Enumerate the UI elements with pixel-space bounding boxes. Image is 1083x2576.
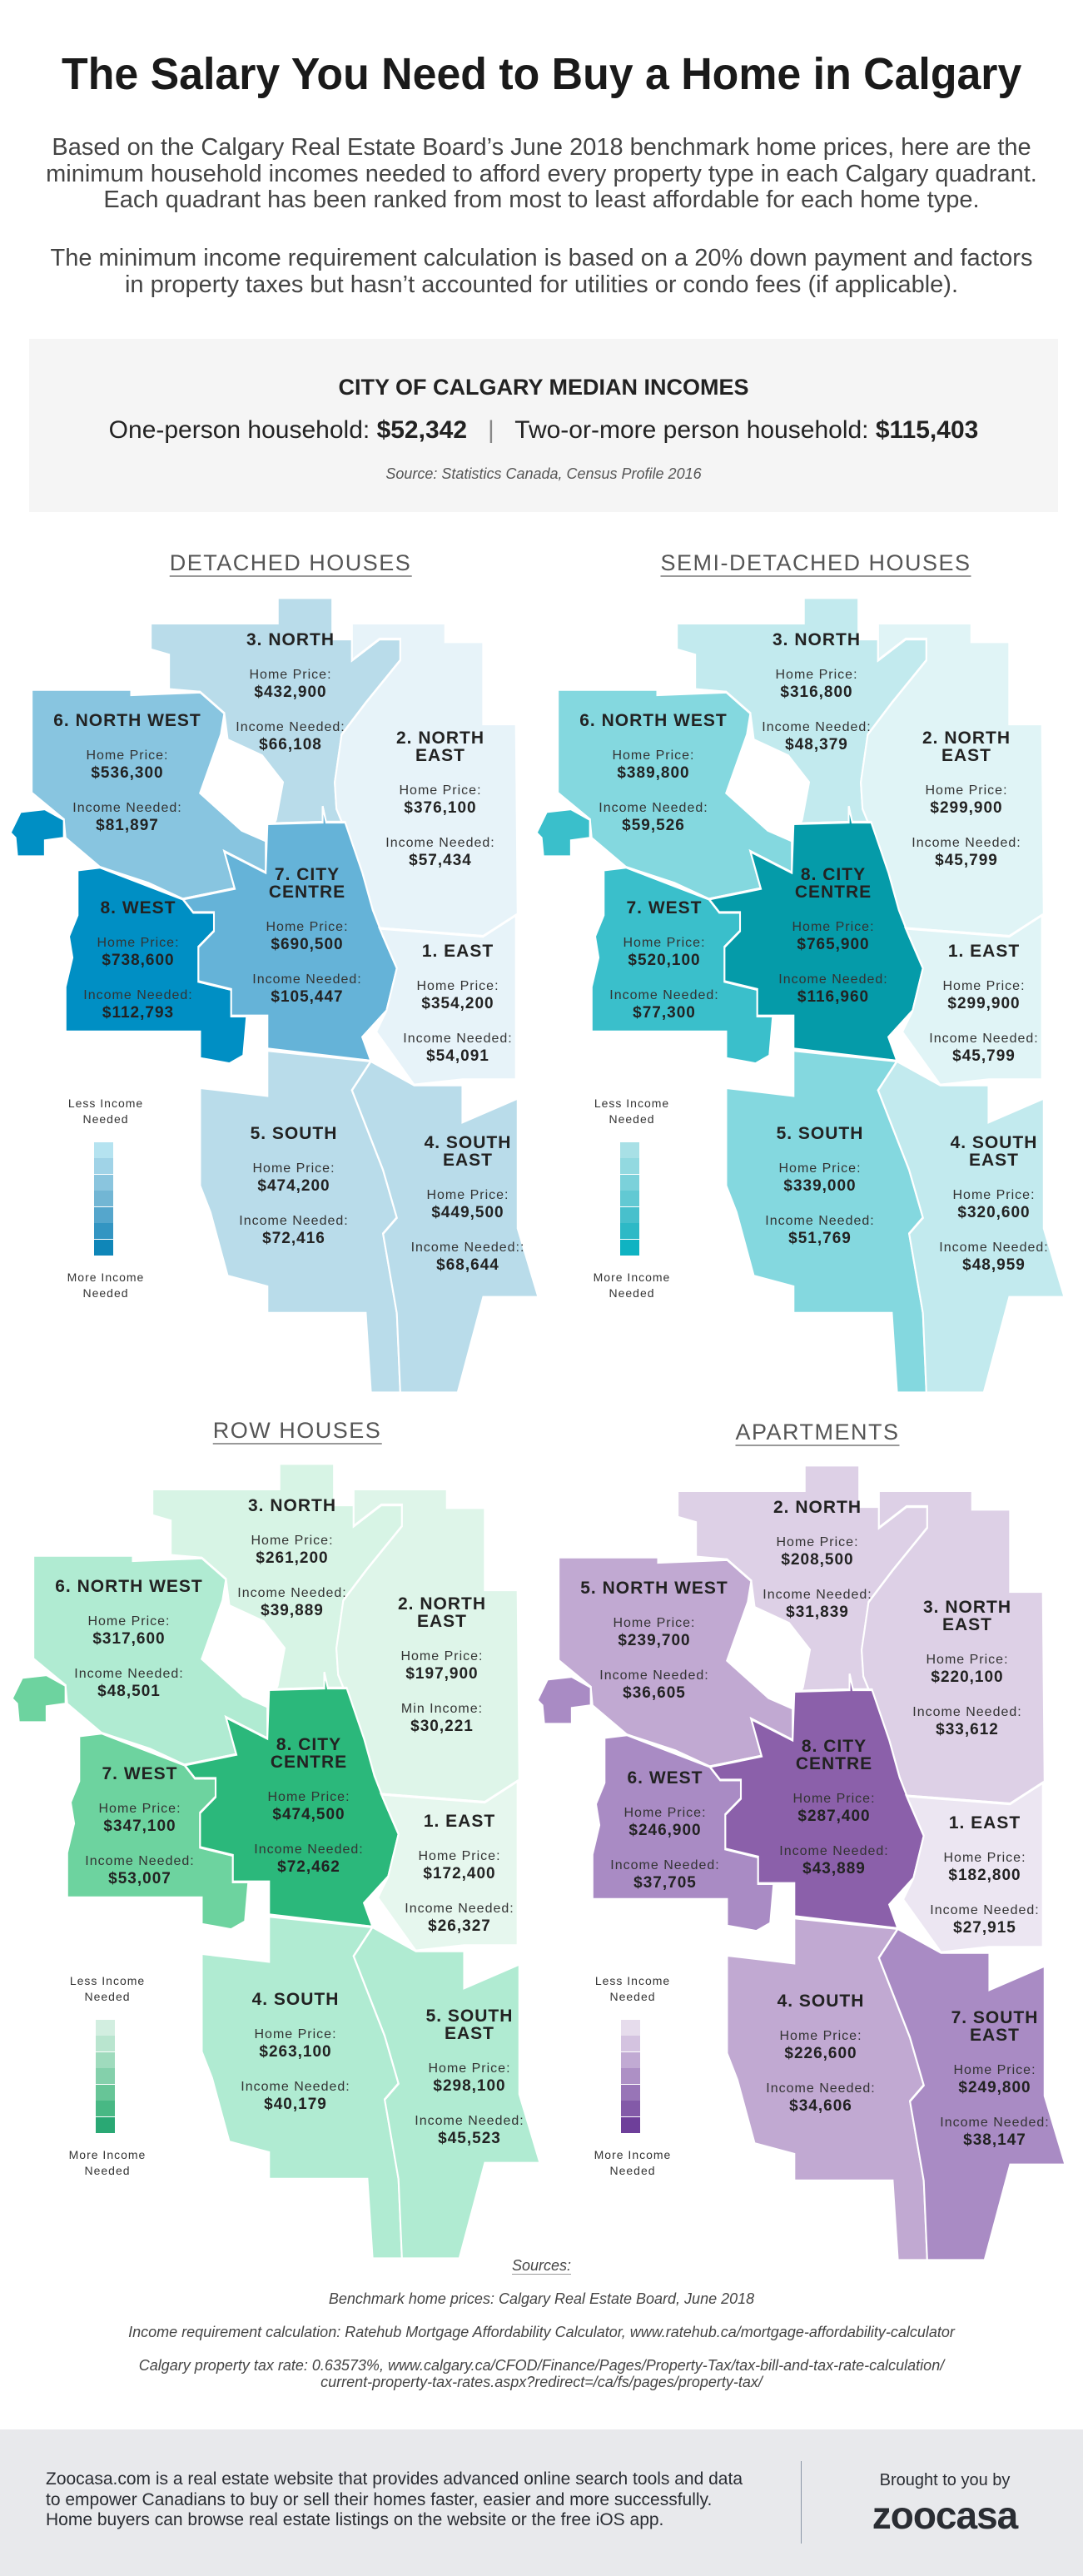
label: north west: $317,600	[92, 1630, 166, 1648]
methodology text: The minimum income requirement calculation is based on a 20% down payment and factors	[51, 245, 1032, 271]
logo: zoocasa: zoocasa	[872, 2494, 1017, 2537]
label: east: $27,915	[953, 1919, 1016, 1937]
legend	[594, 1097, 670, 1300]
label: north east: EAST	[942, 1615, 992, 1634]
label: city centre	[779, 1738, 889, 1877]
legend: Needed	[609, 1286, 655, 1300]
label: east: $354,200	[421, 995, 494, 1012]
label: west	[85, 1764, 195, 1887]
label: city centre: CENTRE	[795, 883, 872, 902]
label: south east: 4. SOUTH	[951, 1133, 1037, 1152]
label: north: Income Needed:	[762, 720, 872, 734]
label: west: $738,600	[102, 952, 175, 969]
label: south: $34,606	[789, 2097, 852, 2115]
label: south: 5. SOUTH	[251, 1124, 337, 1143]
label: north east: Income Needed:	[912, 1705, 1022, 1719]
label: west: 8. WEST	[100, 898, 176, 918]
label: west: Home Price:	[98, 1802, 181, 1816]
label: west: Income Needed:	[85, 1854, 195, 1868]
label: east: Income Needed:	[405, 1902, 514, 1916]
heading: row houses: ROW HOUSES	[213, 1418, 381, 1443]
methodology text	[51, 245, 1032, 298]
label: city centre: CENTRE	[269, 883, 345, 902]
sources: Sources:	[512, 2257, 571, 2274]
legend: Needed	[84, 2164, 131, 2177]
sources: Benchmark home prices: Calgary Real Estate Board, June 2018	[329, 2290, 754, 2307]
label: south east: EAST	[445, 2024, 494, 2043]
label: north west	[53, 711, 201, 834]
intro text: Each quadrant has been ranked from most to least affordable for each home type.	[103, 186, 980, 213]
legend	[69, 1974, 146, 2177]
footer	[0, 2429, 1083, 2576]
label: north west: $48,501	[97, 1683, 161, 1700]
label: north west: $81,897	[96, 817, 159, 834]
label: north west	[55, 1577, 203, 1700]
label: south east	[411, 1133, 524, 1274]
panel: detached map	[12, 599, 537, 1392]
legend: More Income	[594, 1271, 670, 1284]
label: city centre: CENTRE	[271, 1753, 347, 1772]
label: north east: Income Needed:	[385, 836, 495, 850]
label: north east: $57,434	[409, 852, 472, 869]
label: north east: EAST	[417, 1612, 467, 1631]
label: north west: Income Needed:	[74, 1667, 184, 1681]
footer about text: Home buyers can browse real estate listings on the website or the free iOS app.	[46, 2510, 663, 2529]
label: east	[403, 942, 513, 1065]
label: north: 3. NORTH	[248, 1496, 336, 1515]
label: north: 3. NORTH	[773, 630, 861, 649]
label: south: 4. SOUTH	[777, 1992, 864, 2011]
label: north east	[912, 729, 1021, 869]
label: west: $53,007	[108, 1870, 171, 1887]
label: north west: $239,700	[618, 1632, 691, 1649]
label: city centre: $72,462	[277, 1858, 340, 1876]
label: west: Home Price:	[623, 936, 706, 950]
label: south: Income Needed:	[241, 2080, 350, 2094]
label: city centre: $474,500	[272, 1806, 345, 1823]
label: north east: $220,100	[931, 1668, 1004, 1686]
label: south east: 5. SOUTH	[426, 2007, 513, 2026]
legend: Less Income	[68, 1097, 143, 1110]
label: south: $40,179	[264, 2096, 327, 2113]
label: east	[930, 1814, 1040, 1937]
label: north: Home Price:	[249, 668, 332, 682]
label: south	[765, 1124, 875, 1247]
footer about text: Zoocasa.com is a real estate website that provides advanced online search tools and data	[46, 2469, 743, 2489]
label: city centre: 7. CITY	[275, 865, 340, 884]
label: north east: EAST	[415, 746, 465, 765]
intro text: Based on the Calgary Real Estate Board’s June 2018 benchmark home prices, here are the	[52, 134, 1031, 161]
label: north west: Income Needed:	[599, 801, 708, 815]
label: south east	[940, 2009, 1050, 2149]
label: west: Income Needed:	[609, 988, 719, 1002]
sources	[0, 2255, 1083, 2390]
label: east: $172,400	[423, 1865, 496, 1882]
label: south: $226,600	[784, 2045, 857, 2062]
label: city centre	[778, 865, 888, 1006]
label: south east: Home Price:	[428, 2061, 511, 2076]
label: west: 6. WEST	[627, 1768, 703, 1788]
label: north: $66,108	[259, 736, 322, 753]
label: south: $263,100	[259, 2043, 332, 2061]
label: south: Income Needed:	[239, 1214, 349, 1228]
label: south east: $449,500	[431, 1204, 504, 1221]
label: city centre: $690,500	[271, 936, 344, 953]
legend: Needed	[84, 1990, 131, 2003]
label: city centre	[252, 865, 362, 1006]
label: south: Home Price:	[254, 2027, 337, 2041]
label: north	[236, 630, 345, 753]
label: city centre: Income Needed:	[254, 1842, 364, 1857]
label: north west: 6. NORTH WEST	[55, 1577, 203, 1596]
label: north west: Home Price:	[612, 748, 695, 763]
label: south: Home Price:	[779, 2029, 862, 2043]
legend: Needed	[609, 2164, 656, 2177]
label: east: $54,091	[426, 1047, 489, 1065]
label: south east: Income Needed:	[940, 2116, 1050, 2130]
sources: current-property-tax-rates.aspx?redirect=/ca/fs/pages/property-tax/	[320, 2374, 763, 2390]
label: city centre: 8. CITY	[802, 1737, 867, 1756]
label: city centre: Home Price:	[792, 920, 875, 934]
label: south east: Home Price:	[953, 2063, 1036, 2077]
label: north east: Home Price:	[926, 1653, 1009, 1667]
label: north	[763, 1498, 872, 1621]
label: north east: $30,221	[410, 1718, 474, 1735]
label: south east: $48,959	[962, 1256, 1026, 1274]
label: north: $316,800	[780, 684, 853, 701]
label: city centre: $105,447	[271, 988, 344, 1006]
legend: Needed	[82, 1112, 129, 1126]
label: north east	[385, 729, 495, 869]
label: north west: 6. NORTH WEST	[53, 711, 201, 730]
label: north east	[912, 1599, 1022, 1738]
label: west: 7. WEST	[626, 898, 703, 918]
intro text	[46, 134, 1037, 213]
methodology text: in property taxes but hasn’t accounted for utilities or condo fees (if applicable).	[125, 271, 958, 298]
panel: semi-detached map	[538, 599, 1063, 1392]
label: east: $182,800	[948, 1867, 1021, 1884]
map shapes	[12, 599, 537, 1392]
label: east: Income Needed:	[930, 1903, 1040, 1917]
label: north west: $59,526	[622, 817, 685, 834]
label: city centre: Income Needed:	[252, 972, 362, 987]
label: north east: 2. NORTH	[922, 729, 1011, 748]
label: north: $432,900	[254, 684, 327, 701]
median values: One-person household: $52,342 | Two-or-more person household: $115,403	[109, 416, 978, 444]
sources: Calgary property tax rate: 0.63573%, www.calgary.ca/CFOD/Finance/Pages/Property-Tax/tax-bill-and-tax-rate-calculation/	[139, 2357, 944, 2374]
label: east: Home Price:	[942, 979, 1026, 993]
label: north: $39,889	[261, 1602, 324, 1619]
label: north: Home Price:	[775, 668, 858, 682]
label: south east: Home Price:	[426, 1188, 509, 1202]
label: south east: Home Price:	[952, 1188, 1036, 1202]
label: west	[610, 1769, 720, 1892]
label: north: $31,839	[786, 1604, 849, 1621]
label: north east: Home Price:	[400, 1649, 484, 1663]
map shapes	[538, 599, 1063, 1392]
label: north west: Home Price:	[87, 1614, 171, 1629]
label: south: 4. SOUTH	[252, 1990, 339, 2009]
map shapes	[539, 1466, 1064, 2260]
label: east: 1. EAST	[949, 1813, 1021, 1833]
label: south east: EAST	[969, 1151, 1019, 1170]
label: north: Income Needed:	[237, 1586, 347, 1600]
label: north: Home Price:	[251, 1534, 334, 1548]
footer about text	[46, 2469, 743, 2531]
label: south	[239, 1124, 349, 1247]
label: city centre: 8. CITY	[801, 865, 866, 884]
legend: Less Income	[70, 1974, 145, 1987]
label: south	[766, 1992, 876, 2115]
label: east: 1. EAST	[948, 942, 1020, 961]
label: north west: Home Price:	[613, 1616, 696, 1630]
label: north: Home Price:	[776, 1535, 859, 1549]
label: north west: 5. NORTH WEST	[580, 1579, 728, 1598]
label: west: $520,100	[628, 952, 701, 969]
label: north: 3. NORTH	[246, 630, 335, 649]
label: south: Income Needed:	[766, 2081, 876, 2096]
label: city centre: Income Needed:	[778, 972, 888, 987]
label: north west: Income Needed:	[72, 801, 182, 815]
label: south: Home Price:	[778, 1161, 862, 1176]
label: west: $347,100	[103, 1818, 176, 1835]
label: south east: EAST	[970, 2026, 1020, 2045]
label: south east: Income Needed:	[939, 1241, 1049, 1255]
legend: Needed	[609, 1112, 655, 1126]
label: north east: $376,100	[404, 799, 477, 817]
label: north east: $45,799	[935, 852, 998, 869]
label: north east: 2. NORTH	[396, 729, 484, 748]
label: east: Home Price:	[416, 979, 499, 993]
label: north: $261,200	[256, 1549, 329, 1567]
label: north east: Home Price:	[925, 783, 1008, 798]
label: west	[83, 898, 193, 1022]
label: south: $339,000	[783, 1177, 857, 1195]
label: south: $474,200	[257, 1177, 330, 1195]
legend: More Income	[69, 2148, 146, 2161]
label: south east: EAST	[443, 1151, 493, 1170]
label: city centre	[254, 1735, 364, 1876]
label: west: $37,705	[633, 1874, 697, 1892]
label: east: Home Price:	[943, 1851, 1026, 1865]
label: south east: $45,523	[438, 2130, 501, 2147]
label: north east: Home Price:	[399, 783, 482, 798]
label: north west	[579, 711, 728, 834]
label: city centre: $765,900	[797, 936, 870, 953]
legend	[67, 1097, 144, 1300]
label: city centre: 8. CITY	[276, 1735, 341, 1754]
label: south: Home Price:	[252, 1161, 335, 1176]
label: south east: $298,100	[433, 2077, 506, 2095]
label: north east: Income Needed:	[912, 836, 1021, 850]
label: north east: $299,900	[930, 799, 1003, 817]
heading: apartments: APARTMENTS	[735, 1420, 900, 1445]
label: south: $72,416	[262, 1230, 325, 1247]
legend	[527, 1973, 743, 2181]
label: south	[241, 1990, 350, 2113]
label: south east: 7. SOUTH	[951, 2008, 1038, 2027]
label: south east: 4. SOUTH	[425, 1133, 511, 1152]
median heading: CITY OF CALGARY MEDIAN INCOMES	[338, 375, 749, 400]
label: south east: $249,800	[958, 2079, 1031, 2096]
label: south east: $68,644	[436, 1256, 499, 1274]
label: north east	[398, 1594, 486, 1735]
panel: row houses map	[13, 1465, 539, 2258]
label: north east: $197,900	[405, 1665, 479, 1683]
label: north	[762, 630, 872, 753]
label: north west	[580, 1579, 728, 1702]
label: north east: Min Income:	[401, 1702, 483, 1716]
label: east: $299,900	[947, 995, 1021, 1012]
label: north east: $33,612	[936, 1721, 999, 1738]
label: south east: $38,147	[963, 2131, 1026, 2149]
label: east: Home Price:	[418, 1849, 501, 1863]
label: north west: $389,800	[617, 764, 690, 782]
label: north west: 6. NORTH WEST	[579, 711, 728, 730]
legend: More Income	[67, 1271, 144, 1284]
label: city centre: Home Price:	[267, 1790, 350, 1804]
label: north: $208,500	[781, 1551, 854, 1569]
label: north: Income Needed:	[763, 1588, 872, 1602]
label: east: 1. EAST	[424, 1812, 495, 1831]
label: south east: Income Needed::	[411, 1241, 524, 1255]
label: north east: 3. NORTH	[923, 1598, 1011, 1617]
heading: detached houses: DETACHED HOUSES	[170, 550, 411, 575]
label: north east: 2. NORTH	[398, 1594, 486, 1614]
label: city centre: $287,400	[797, 1808, 871, 1825]
legend: Less Income	[595, 1974, 670, 1987]
label: city centre: $43,889	[802, 1860, 866, 1877]
legend: Needed	[609, 1990, 656, 2003]
label: east: 1. EAST	[422, 942, 494, 961]
label: west: Income Needed:	[83, 988, 193, 1002]
label: city centre: Home Price:	[792, 1792, 876, 1806]
label: north east: EAST	[941, 746, 991, 765]
heading: semi-detached houses: SEMI-DETACHED HOUSES	[660, 550, 971, 575]
label: north: $48,379	[785, 736, 848, 753]
label: north west: Income Needed:	[599, 1668, 709, 1683]
label: west: Home Price:	[623, 1806, 707, 1820]
brought to you by: Brought to you by	[880, 2471, 1010, 2489]
intro text: minimum household incomes needed to afford every property type in each Calgary quadrant.	[46, 160, 1037, 186]
label: east: Income Needed:	[403, 1032, 513, 1046]
label: south: $51,769	[788, 1230, 852, 1247]
label: south: 5. SOUTH	[777, 1124, 863, 1143]
label: city centre: $116,960	[797, 988, 869, 1006]
legend: Needed	[82, 1286, 129, 1300]
label: north: Income Needed:	[236, 720, 345, 734]
title: The Salary You Need to Buy a Home in Calgary	[62, 49, 1021, 99]
legend: Less Income	[594, 1097, 669, 1110]
panel: apartments map	[539, 1466, 1064, 2260]
label: west: $112,793	[102, 1004, 174, 1022]
label: south east: $320,600	[957, 1204, 1031, 1221]
label: south east	[939, 1133, 1049, 1274]
label: north west: $36,605	[623, 1684, 686, 1702]
sources: Income requirement calculation: Ratehub Mortgage Affordability Calculator, www.ratehub.ca/mortgage-affordability-calculator	[128, 2324, 955, 2340]
median source: Source: Statistics Canada, Census Profile 2016	[385, 465, 702, 482]
label: west	[609, 898, 719, 1022]
label: north	[237, 1496, 347, 1619]
label: north: 2. NORTH	[773, 1498, 862, 1517]
label: city centre: Home Price:	[266, 920, 349, 934]
label: south east: Income Needed:	[415, 2114, 524, 2128]
label: city centre: CENTRE	[796, 1754, 872, 1773]
label: west: $246,900	[628, 1822, 702, 1839]
label: south east	[415, 2007, 524, 2147]
label: north west: $536,300	[91, 764, 164, 782]
footer about text: to empower Canadians to buy or sell their homes faster, easier and more successfully.	[46, 2489, 712, 2509]
label: south: Income Needed:	[765, 1214, 875, 1228]
legend: More Income	[594, 2148, 671, 2161]
label: east	[405, 1812, 514, 1935]
label: east: Income Needed:	[929, 1032, 1039, 1046]
label: west: 7. WEST	[102, 1764, 178, 1783]
map shapes	[13, 1465, 539, 2258]
label: north west: Home Price:	[86, 748, 169, 763]
label: city centre: Income Needed:	[779, 1844, 889, 1858]
label: east: $45,799	[952, 1047, 1016, 1065]
label: east	[929, 942, 1039, 1065]
panel: median incomes	[29, 339, 1058, 512]
label: west: $77,300	[633, 1004, 696, 1022]
label: west: Home Price:	[97, 936, 180, 950]
label: east: $26,327	[428, 1917, 491, 1935]
label: west: Income Needed:	[610, 1858, 720, 1872]
